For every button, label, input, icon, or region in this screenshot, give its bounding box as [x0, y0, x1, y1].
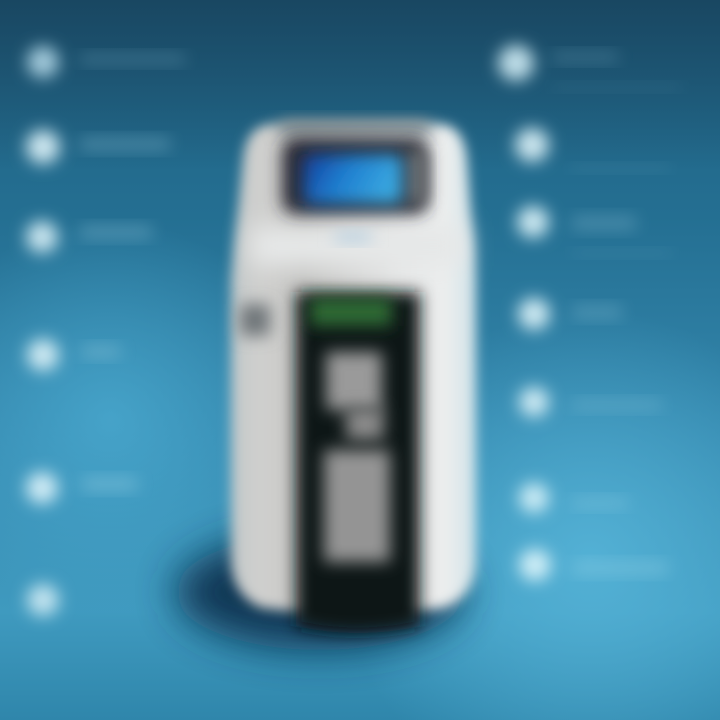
- icon: left bullet 4: [27, 339, 120, 371]
- device body: [231, 124, 476, 614]
- upper readout: [326, 352, 384, 440]
- icon: left bullet 2: [26, 130, 170, 164]
- icon: left bullet 6: [27, 584, 59, 616]
- green indicator: [310, 298, 392, 326]
- icon: right bullet 5: [519, 387, 662, 417]
- upper white collar: [250, 226, 466, 266]
- lower readout: [324, 450, 390, 562]
- status light: [335, 232, 371, 242]
- front panel: [296, 292, 420, 633]
- icon: right bullet 4: [518, 298, 622, 330]
- icon: right bullet 1: [498, 45, 682, 90]
- left feature list: [26, 46, 185, 616]
- icon: right bullet 6: [519, 483, 628, 513]
- device: [231, 120, 476, 633]
- side vent: [240, 304, 270, 336]
- device shadow: [175, 534, 465, 650]
- icon: left bullet 1: [27, 46, 185, 78]
- right feature list: [498, 45, 682, 581]
- right bezel grey: [408, 150, 426, 204]
- icon: right bullet 3: [517, 206, 672, 256]
- top shading: [280, 120, 430, 136]
- icon: left bullet 3: [26, 221, 152, 253]
- display screen: [303, 154, 403, 204]
- icon: left bullet 5: [26, 472, 137, 504]
- display bezel: [282, 138, 428, 214]
- icon: right bullet 2: [515, 128, 670, 171]
- icon: right bullet 7: [519, 549, 668, 581]
